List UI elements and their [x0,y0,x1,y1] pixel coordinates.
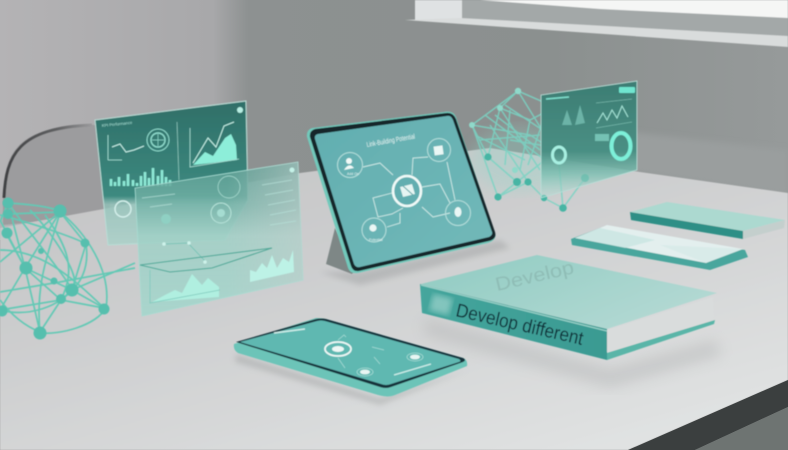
book shadow [424,318,722,388]
tablet node: profile: Add On [347,172,359,176]
stacked notebook right [630,202,785,239]
tablet node: profile [338,152,362,178]
floor [695,407,788,450]
bar chart [111,168,170,186]
table top [0,148,788,450]
tablet shadow [320,240,510,285]
tablet title: Link-Building Potential [366,134,416,149]
phone screen hub [325,342,351,356]
tablet hub icon [393,176,421,206]
panel: front dashboard glass [135,162,303,316]
tablet stand [326,228,356,274]
area chart [193,134,237,165]
area chart left [152,274,219,302]
gauge icon [147,129,169,151]
book spine title: Develop different [454,300,586,350]
ring [115,201,131,217]
tablet node: image [428,138,450,162]
donut gauge [612,133,630,159]
tablet node: pin left: Potential [369,238,383,242]
panel: right dashboard glass [541,81,637,198]
area chart right [250,250,294,282]
chair [3,125,110,225]
phone right [571,225,748,270]
network sculpture: left [0,198,135,340]
wall [0,0,788,240]
book [420,255,717,360]
tablet [307,112,495,273]
panel: back dashboard glass [95,101,248,245]
phone screen nodes [274,329,431,376]
table edge [628,380,788,450]
tablet node: pin right [446,200,470,226]
book cover title: Develop [493,257,576,296]
panel: back dashboard glass: KPI Performance [102,120,133,128]
line chart [108,135,144,160]
wall lower band [630,132,788,195]
window [405,0,788,47]
tablet connectors [363,157,455,227]
phone front [234,318,467,396]
network sculpture: right [469,88,589,212]
phone shadow [235,354,468,405]
tablet node: pin left [362,218,386,242]
